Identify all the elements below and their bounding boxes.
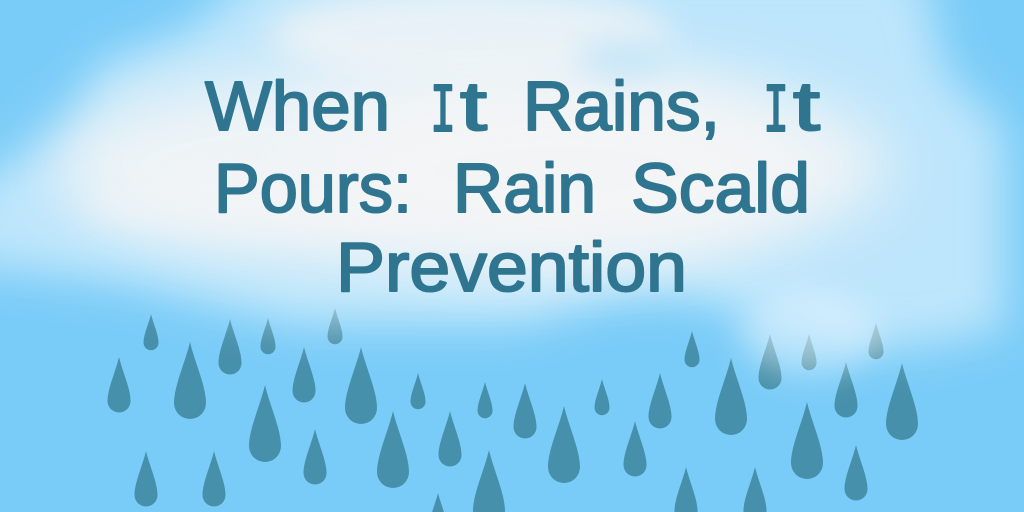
clouds xyxy=(0,0,1005,375)
title: t xyxy=(460,67,487,145)
title: t xyxy=(793,67,820,145)
title: Scald xyxy=(631,149,810,227)
title: Rain xyxy=(453,149,596,227)
raindrops xyxy=(108,308,918,512)
title: Pours: xyxy=(214,149,412,227)
title: I xyxy=(763,74,789,153)
title xyxy=(205,67,820,306)
title: When xyxy=(205,67,390,145)
title: I xyxy=(430,74,456,153)
title: Prevention xyxy=(336,228,687,306)
title: Rains, xyxy=(523,67,720,145)
